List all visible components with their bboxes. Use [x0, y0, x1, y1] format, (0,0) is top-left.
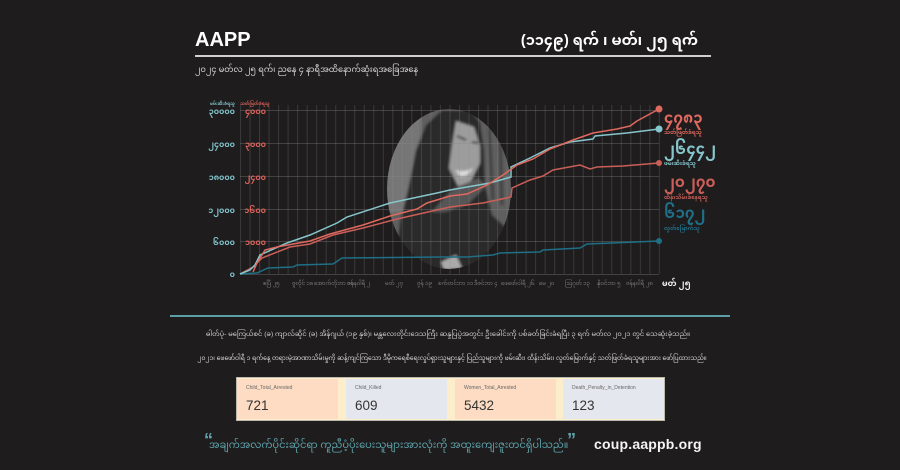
y axis labels: arrested scale: ၂၄၀၀၀: [208, 140, 235, 151]
x axis end label: မတ် ၂၅: [662, 277, 691, 290]
title: AAPP: AAPP: [195, 29, 251, 51]
header rule: [195, 55, 711, 57]
y axis labels: killed scale: ၁၆၀၀: [244, 204, 266, 215]
card: child total arrested: [237, 379, 338, 419]
line: killed red: [253, 106, 662, 272]
stat: killed: ၄၇၈၃: [664, 110, 702, 127]
subtitle: date and time: ၂၀၂၄ မတ်လ ၂၅ ရက်၊ ညနေ ၄ နာရီအထိနောက်ဆုံးရအခြေအနေ: [195, 65, 418, 74]
y axis labels: killed scale: ၄၀၀၀: [245, 107, 266, 118]
card: child total arrested: Child_Total_Arrested: [246, 385, 292, 391]
card: child killed: 609: [355, 398, 378, 413]
axis captions: သတ်ဖြတ်ခံရသူ: [240, 99, 270, 108]
x axis labels: နိုဝင်ဘာ ၅: [597, 279, 621, 288]
portrait photo: [385, 108, 513, 272]
y axis labels: arrested scale: [208, 107, 235, 279]
y axis labels: arrested scale: ၀: [230, 270, 235, 279]
y axis labels: killed scale: ၂၄၀၀: [245, 173, 266, 184]
stat: killed: သတ်ဖြတ်ခံရသူ: [664, 130, 702, 136]
y axis labels: arrested scale: ၁၈၀၀၀: [209, 173, 235, 182]
x axis labels: ဖေဖော်ဝါရီ ၂၆: [501, 279, 535, 288]
x axis labels: အောက်တိုဘာ ၁၀: [314, 279, 354, 288]
stat: killed: [664, 110, 702, 137]
axis captions: [210, 99, 270, 108]
card: women total arrested: Women_Total_Arrested: [464, 385, 516, 391]
stat: detained: ၂၀၂၇၀: [664, 174, 716, 191]
x axis labels: ဇန်နဝါရီ ၂: [347, 279, 371, 288]
quote: အချက်အလက်ပိုင်းဆိုင်ရာ ကူညီပံ့ပိုးပေးသူများအားလုံးကို အထူးကျေးဇူးတင်ရှိပါသည်။: [209, 440, 568, 451]
card: death penalty in detention: [563, 379, 664, 419]
x axis labels: ဧပြီ ၂၅: [263, 279, 280, 288]
card: death penalty in detention: 123: [572, 398, 595, 413]
x axis labels: ဇူလိုင် ၁၈: [292, 279, 314, 288]
stat: arrested: ဖမ်းဆီးခံရသူ: [664, 161, 696, 167]
x axis labels: [263, 279, 653, 288]
x axis labels: ဩဂုတ် ၁၃: [565, 279, 590, 288]
y axis labels: arrested scale: ၆၀၀၀: [213, 236, 235, 247]
stat: detained: ထိန်းသိမ်းခံနေရသူ: [664, 195, 708, 201]
text: ”: [567, 430, 576, 450]
panel: statistics cards: [237, 378, 664, 420]
stat: wanted: ၆၁၇၂: [664, 205, 705, 222]
paragraph: caption line 1: ဓါတ်ပုံ- မကြေယ်စင် (ခ) ကျာလ်ဆိုင် (ခ) အိန်ဂျယ် (၁၉ နှစ်)၊ မန္တလေးတိုင်းဒေသကြီး ဆန္ဒပြပွဲအတွင်း ဦးခေါင်းကို ပစ်ခတ်ခြင်းခံရပြီး ၃ ရက် မတ်လ ၂၀၂၁ တွင် သေဆုံးခဲ့သည်။: [206, 331, 690, 338]
x axis labels: ဒီဇင်ဘာ ၄: [474, 279, 498, 288]
section divider: [170, 315, 730, 317]
quote: [204, 430, 576, 453]
axis captions: ဖမ်းဆီးခံရသူ: [210, 99, 235, 108]
x axis labels: စက်တင်ဘာ ၁၁: [438, 279, 474, 287]
x axis labels: ဇွန် ၁၉: [417, 279, 432, 288]
x axis labels: မေ ၂၀: [539, 281, 555, 288]
y axis labels: killed scale: ၃၀၀၀: [245, 140, 266, 151]
card: child killed: [346, 379, 447, 419]
heading: days since coup: (၁၁၄၉) ရက် ၊ မတ်၊ ၂၅ ရက်: [521, 33, 698, 49]
line: detained red: [240, 160, 662, 274]
stat: arrested: [664, 138, 716, 168]
paragraph: caption line 2: ၂၀၂၁၊ ဖေဖော်ဝါရီ ၁ ရက်နေ့ တရားမဲ့အာဏာသိမ်းမှုကို ဆန့်ကျင်ကြသော ဒီမိုကရေစီရေးလှုပ်ရှားသူများနှင့် ပြည်သူများကို ဖမ်းဆီး၊ ထိန်းသိမ်း၊ လွတ်မြောက်နှင့် သတ်ဖြတ်ခံရသူများအား ဖော်ပြထားသည်။: [197, 355, 707, 362]
line: child arrested teal: [240, 238, 662, 274]
card: women total arrested: [455, 379, 556, 419]
x axis labels: ဇန်နဝါရီ ၂၈: [626, 279, 653, 288]
card: child killed: Child_Killed: [355, 385, 381, 391]
website url: coup.aappb.org: [594, 436, 702, 452]
card: death penalty in detention: Death_Penalty_in_Detention: [572, 385, 636, 391]
y axis labels: arrested scale: ၁၂၀၀၀: [208, 206, 235, 217]
x axis labels: မတ် ၂၇: [385, 279, 404, 288]
grid: [240, 105, 660, 274]
y axis labels: arrested scale: ၃၀၀၀၀: [209, 107, 235, 118]
y axis labels: killed scale: [244, 107, 266, 247]
card: women total arrested: 5432: [464, 398, 494, 413]
stat: wanted: [664, 202, 705, 233]
y axis labels: killed scale: ၁၀၀၀: [245, 238, 266, 247]
stat: detained: [664, 174, 716, 202]
card: child total arrested: 721: [246, 398, 269, 413]
line: arrested light blue: [240, 126, 662, 274]
chart: cumulative lines over portrait: [208, 99, 691, 290]
stat: arrested: ၂၆၄၄၂: [664, 141, 716, 158]
stat: wanted: လွတ်မြောက်သူ: [664, 226, 700, 232]
text: “: [204, 430, 213, 450]
